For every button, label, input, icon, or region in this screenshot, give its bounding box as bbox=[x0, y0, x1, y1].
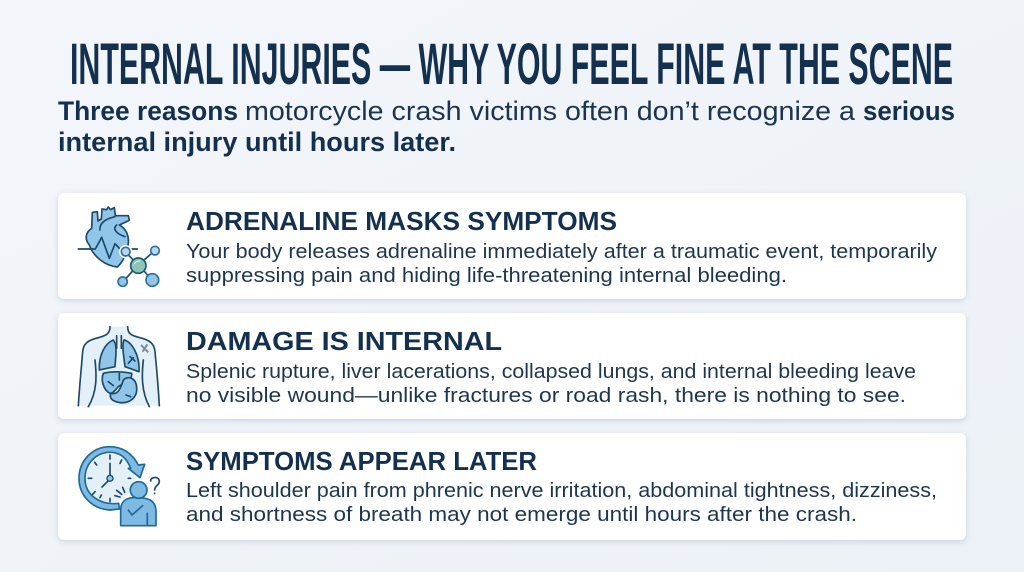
body text bbox=[186, 360, 916, 407]
subtitle bbox=[58, 96, 955, 157]
subtitle: motorcycle crash victims often don’t recognize a bbox=[245, 96, 855, 126]
body text: Your body releases adrenaline immediately after a traumatic event, temporarily bbox=[186, 240, 938, 263]
body text bbox=[186, 240, 938, 287]
panel: symptoms appear later bbox=[58, 433, 966, 540]
panel: adrenaline masks symptoms bbox=[58, 193, 966, 299]
icon: torso with organs bbox=[78, 327, 159, 407]
body text bbox=[186, 479, 937, 526]
subtitle: internal injury until hours later. bbox=[58, 127, 456, 157]
body text: suppressing pain and hiding life-threatening internal bleeding. bbox=[186, 264, 787, 287]
body text: Left shoulder pain from phrenic nerve irritation, abdominal tightness, dizziness, bbox=[186, 479, 937, 502]
heading: ADRENALINE MASKS SYMPTOMS bbox=[186, 208, 617, 236]
icon: clock and person bbox=[79, 447, 159, 526]
heading: SYMPTOMS APPEAR LATER bbox=[186, 448, 537, 476]
body text: and shortness of breath may not emerge until hours after the crash. bbox=[186, 503, 857, 526]
panel: damage is internal bbox=[58, 313, 966, 419]
icon: heart and molecule bbox=[78, 207, 159, 286]
body text: Splenic rupture, liver lacerations, collapsed lungs, and internal bleeding leave bbox=[186, 360, 916, 383]
body text: no visible wound—unlike fractures or road rash, there is nothing to see. bbox=[186, 384, 906, 407]
heading: DAMAGE IS INTERNAL bbox=[186, 328, 502, 356]
subtitle: serious bbox=[863, 96, 955, 126]
subtitle: Three reasons bbox=[58, 96, 238, 126]
